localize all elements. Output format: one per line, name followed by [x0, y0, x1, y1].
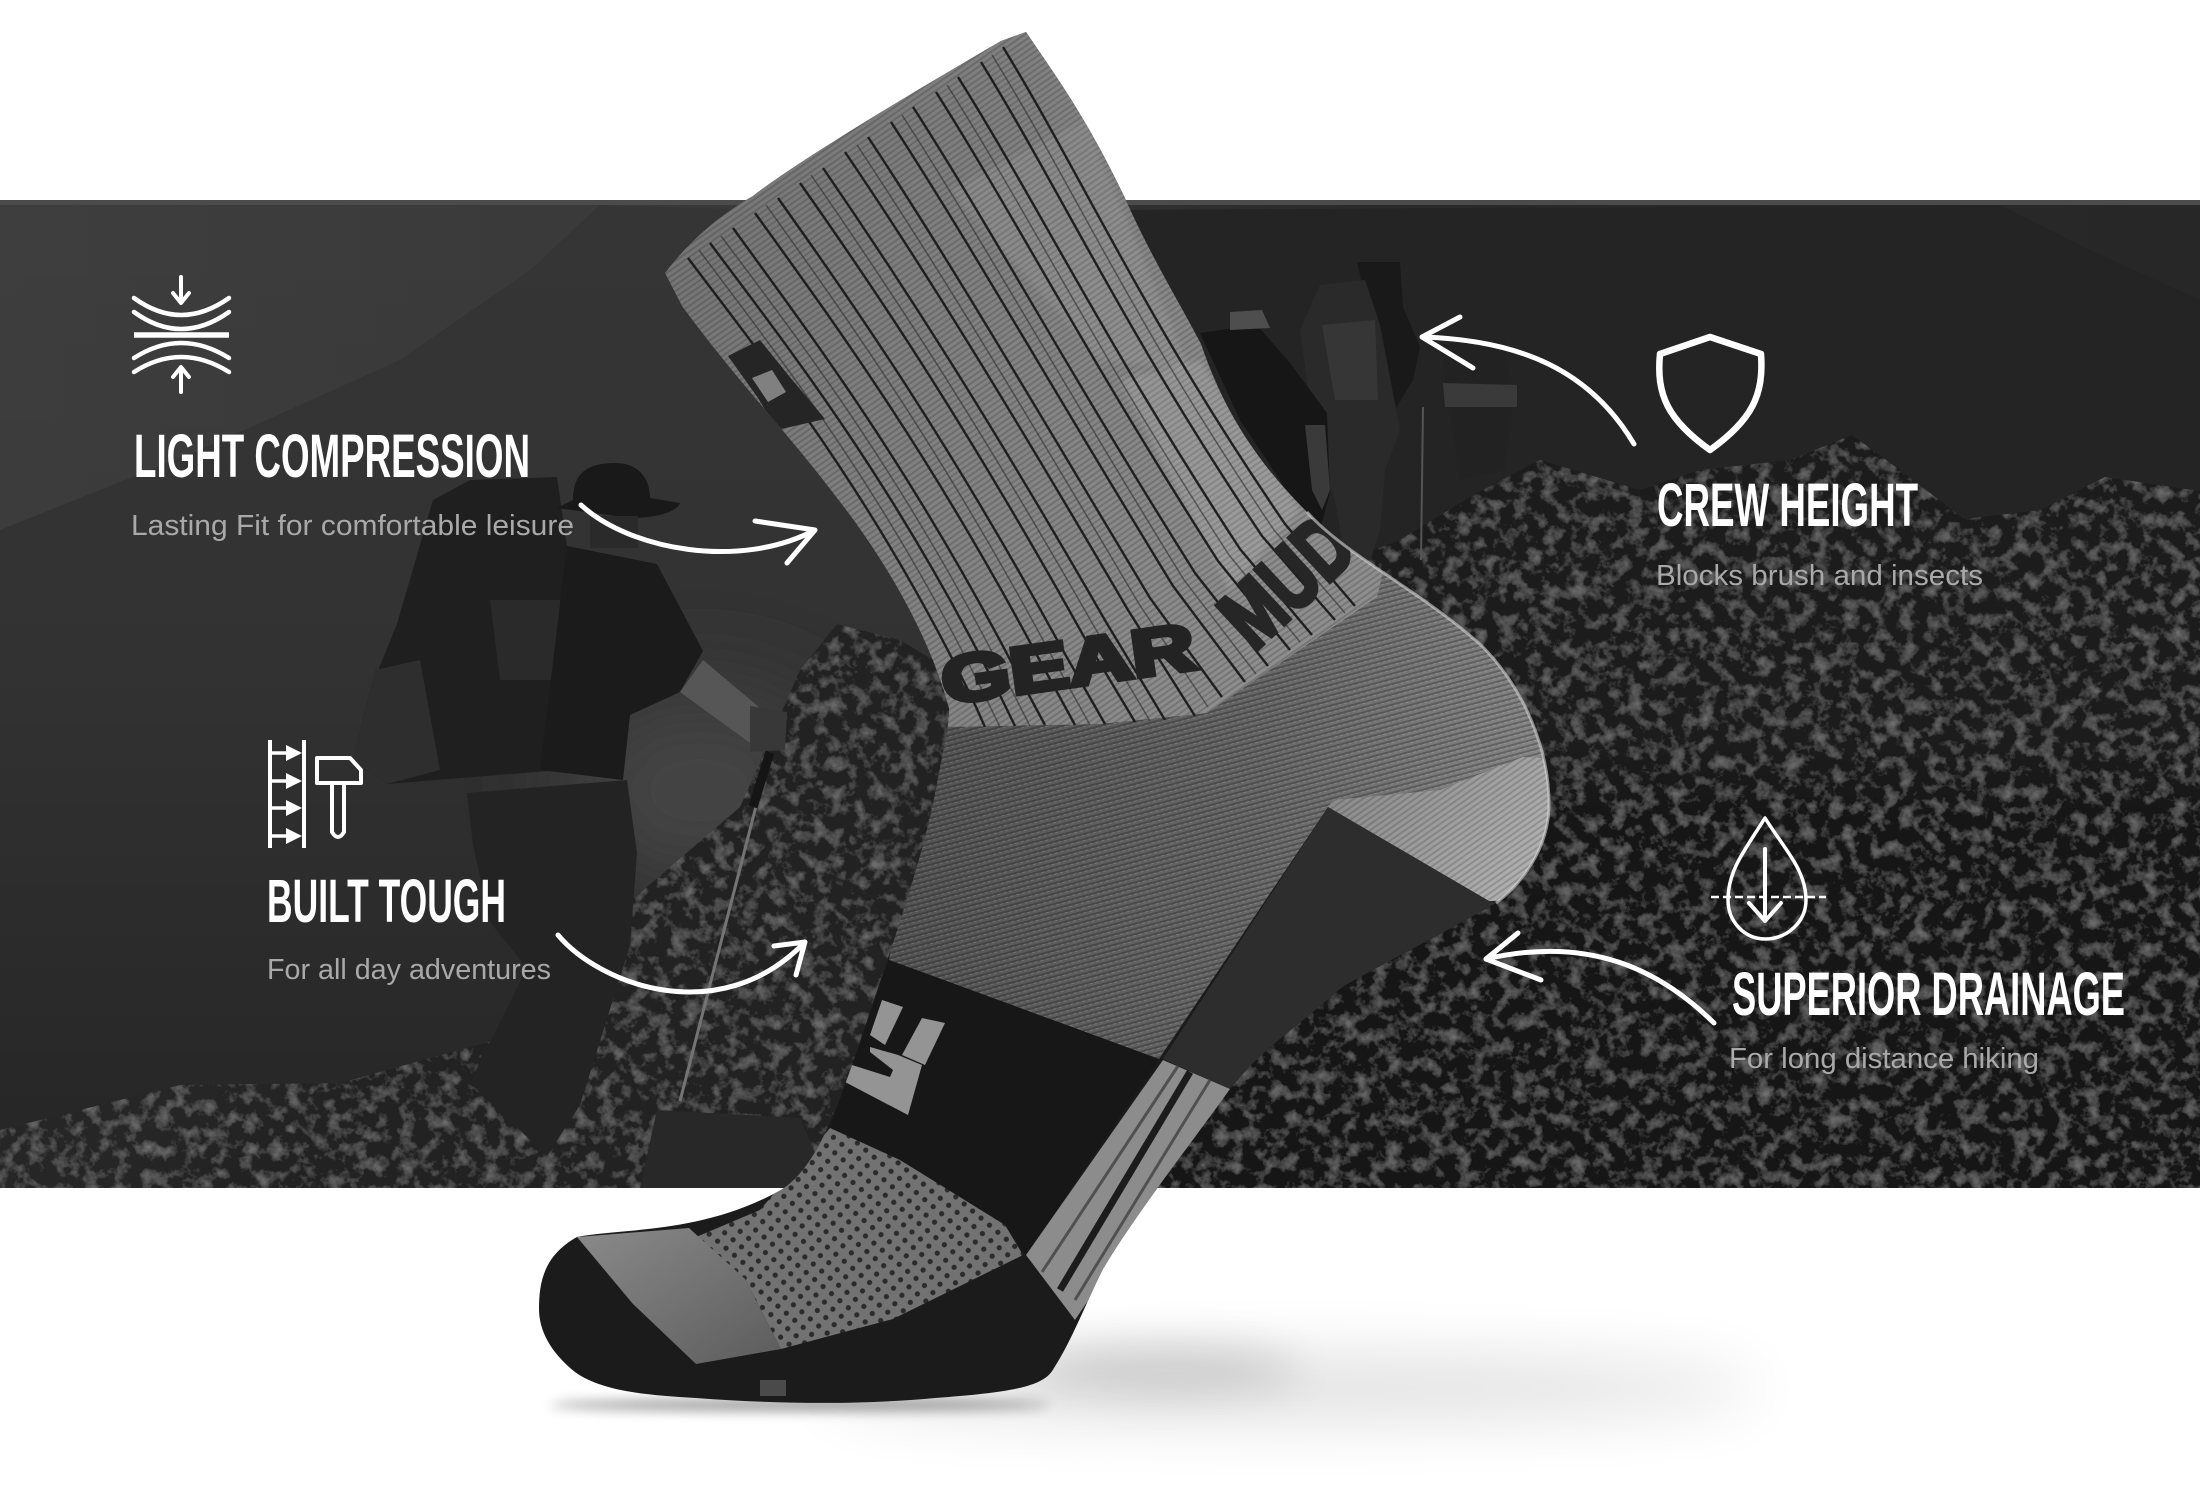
arrow: light compression to sock [581, 505, 815, 563]
sole logo [760, 1380, 786, 1396]
ankle fabric [889, 560, 1600, 1059]
callout: superior drainage [1711, 818, 2125, 1075]
arrow: crew height to sock [1422, 317, 1634, 444]
description: For all day adventures [267, 954, 551, 986]
heading: CREW HEIGHT [1657, 471, 1918, 539]
top edge of the band [0, 200, 2200, 205]
icon: compression [134, 277, 229, 392]
cuff logo [728, 340, 825, 430]
knit wordmark: MUD: MUD [1201, 497, 1373, 666]
rocks right [1158, 438, 2200, 1188]
side stripes [1026, 1060, 1230, 1320]
far ridge right [1130, 209, 1288, 484]
ribbed cuff [665, 32, 1383, 728]
ground shadow [550, 1346, 1760, 1418]
heel dark panel [1163, 807, 1520, 1089]
midfoot mesh [689, 1128, 1023, 1349]
hikers in the distance [1200, 262, 1517, 560]
callout: light compression [131, 277, 574, 542]
sock rim light [1307, 512, 1549, 903]
sock [539, 32, 1550, 1403]
description: Lasting Fit for comfortable leisure [131, 510, 574, 542]
fog glow behind hikers [560, 692, 782, 891]
arch band [889, 960, 1159, 1059]
callout: built tough [267, 740, 551, 986]
description: For long distance hiking [1729, 1043, 2039, 1075]
mountain slope left [0, 429, 247, 774]
arrow: superior drainage to sock [1486, 933, 1714, 1023]
description: Blocks brush and insects [1656, 560, 1983, 592]
icon: shield [1659, 337, 1761, 450]
heading: LIGHT COMPRESSION [134, 422, 530, 490]
panel: hiking photo band [0, 200, 2200, 1188]
icon: drainage drop [1711, 818, 1826, 939]
heading: BUILT TOUGH [267, 867, 506, 935]
rocks lower left [0, 624, 949, 1188]
foreground hiker [353, 463, 830, 1188]
arch logo [845, 1000, 945, 1115]
toe fabric [577, 1228, 781, 1364]
light heel [1328, 757, 1549, 901]
knit wordmark: GEAR: GEAR [937, 609, 1199, 718]
icon: wall and hammer [270, 740, 361, 848]
arrow: built tough to sock [558, 935, 805, 992]
darkening toward the ground [0, 886, 526, 1130]
callout: crew height [1656, 337, 1983, 592]
